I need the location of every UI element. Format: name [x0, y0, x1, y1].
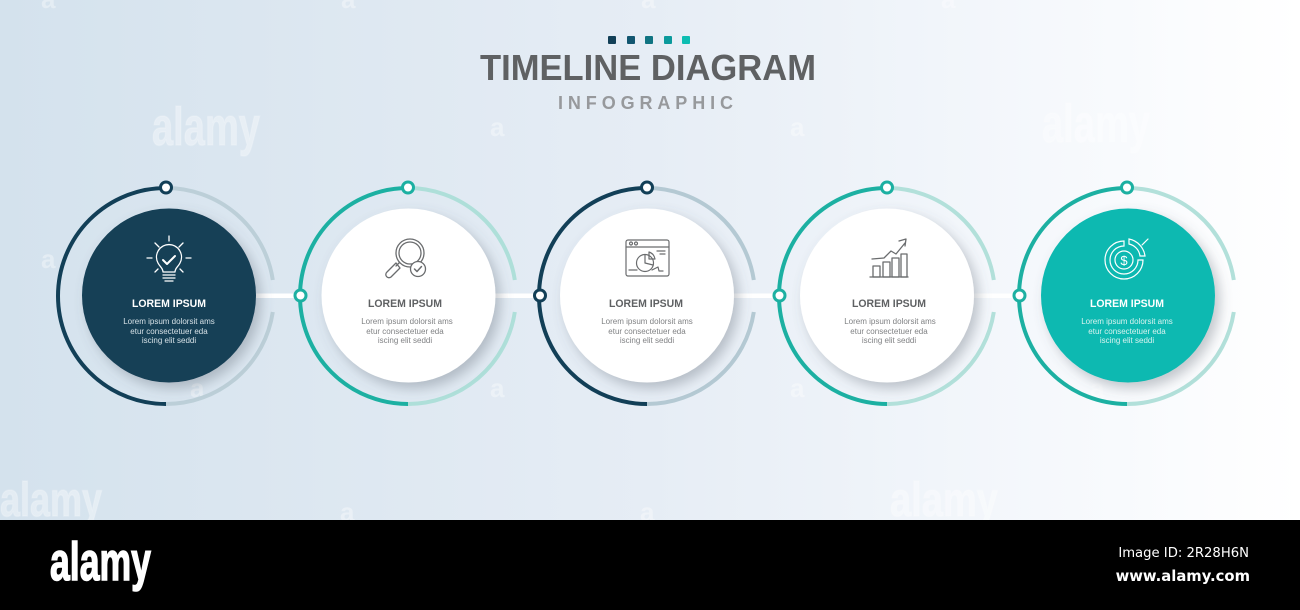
body text — [361, 317, 453, 345]
step 3 — [539, 182, 754, 404]
watermarks: a — [790, 373, 805, 403]
body text: Lorem ipsum dolorsit ams — [361, 317, 453, 326]
footer bar — [0, 520, 1300, 610]
icon: magnifier with check — [386, 239, 426, 278]
body text: iscing elit seddi — [620, 336, 674, 345]
left ring dots — [295, 290, 1025, 301]
body text: etur consectetuer eda — [1088, 327, 1166, 336]
watermarks — [0, 0, 1150, 527]
step 4 — [779, 182, 994, 404]
step 2 — [300, 182, 515, 404]
label: LOREM IPSUM — [1090, 298, 1164, 310]
body text: iscing elit seddi — [378, 336, 432, 345]
disc — [1041, 208, 1215, 382]
body text: iscing elit seddi — [1100, 336, 1154, 345]
connectors — [256, 294, 1019, 298]
watermarks: a — [340, 497, 355, 527]
dollar sign: $ — [1120, 253, 1128, 268]
watermarks: a — [790, 112, 805, 142]
disc — [82, 208, 256, 382]
ring — [1019, 182, 1234, 404]
icon: browser window with chart — [626, 240, 669, 276]
watermarks: alamy — [890, 474, 998, 527]
body text: etur consectetuer eda — [608, 327, 686, 336]
body text — [123, 317, 215, 345]
watermarks: a — [640, 497, 655, 527]
ring — [779, 182, 994, 404]
body text: Lorem ipsum dolorsit ams — [844, 317, 936, 326]
ring — [58, 182, 273, 404]
step 5 — [1019, 182, 1234, 404]
watermarks: a — [190, 373, 205, 403]
body text: iscing elit seddi — [142, 336, 196, 345]
label: LOREM IPSUM — [852, 298, 926, 310]
body text: etur consectetuer eda — [850, 327, 928, 336]
label: LOREM IPSUM — [609, 298, 683, 310]
watermarks: a — [490, 112, 505, 142]
watermarks: alamy — [152, 97, 260, 157]
site url: www.alamy.com — [1116, 568, 1250, 585]
disc — [322, 208, 496, 382]
body text: Lorem ipsum dolorsit ams — [1081, 317, 1173, 326]
subtitle: INFOGRAPHIC — [558, 93, 733, 113]
body text: etur consectetuer eda — [130, 327, 208, 336]
title block — [480, 36, 816, 113]
watermarks: a — [490, 373, 505, 403]
watermarks: alamy — [1042, 94, 1150, 154]
body text — [1081, 317, 1173, 345]
icon: rising bar chart — [870, 239, 908, 277]
title: TIMELINE DIAGRAM — [480, 47, 816, 88]
body text: Lorem ipsum dolorsit ams — [123, 317, 215, 326]
decorative squares — [608, 36, 690, 44]
footer logo: alamy — [50, 532, 151, 592]
step 1 — [58, 182, 273, 404]
body text — [601, 317, 693, 345]
label: LOREM IPSUM — [368, 298, 442, 310]
image id: Image ID: 2R28H6N — [1118, 546, 1249, 561]
icon: dollar target — [1105, 239, 1148, 279]
watermarks: alamy — [0, 474, 102, 527]
body text: Lorem ipsum dolorsit ams — [601, 317, 693, 326]
ring — [539, 182, 754, 404]
icon: light bulb — [147, 236, 191, 281]
label: LOREM IPSUM — [132, 298, 206, 310]
disc — [800, 208, 974, 382]
ring — [300, 182, 515, 404]
watermarks: a — [41, 244, 56, 274]
disc — [560, 208, 734, 382]
watermarks: a — [1090, 373, 1105, 403]
body text: etur consectetuer eda — [366, 327, 444, 336]
body text — [844, 317, 936, 345]
body text: iscing elit seddi — [862, 336, 916, 345]
